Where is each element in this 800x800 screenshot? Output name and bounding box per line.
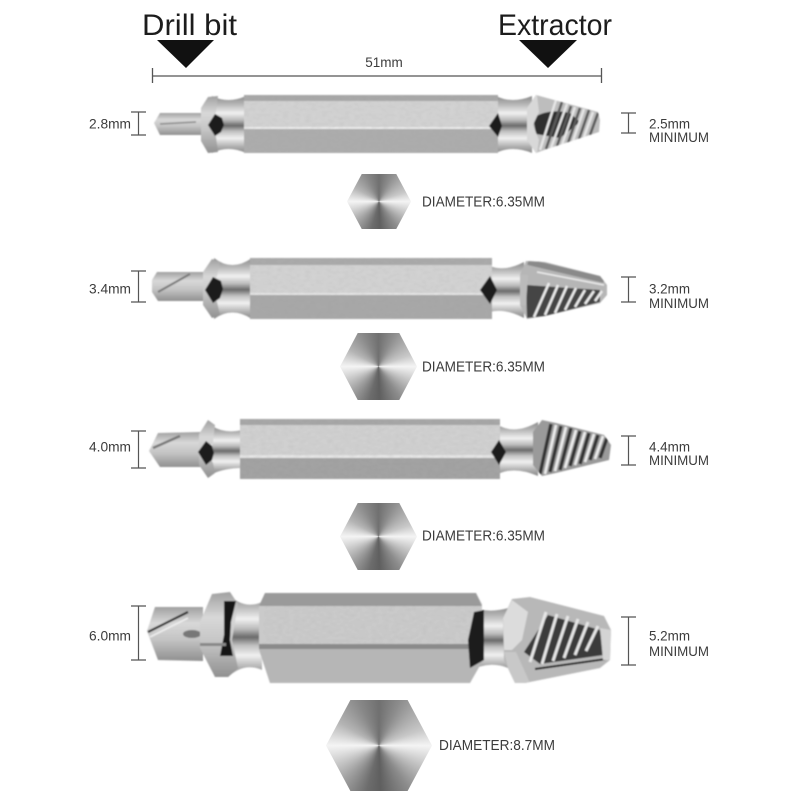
bit 2 left dimension: 3.4mm (89, 282, 131, 296)
bit 3 collar (199, 420, 215, 478)
bit 3 right dimension: 4.4mm (649, 440, 690, 454)
bit 1 right dimension: 2.5mm (649, 116, 690, 132)
hex cross-section 2 (340, 333, 417, 400)
bit 3 (149, 418, 613, 479)
bit 1 drill tip (154, 113, 201, 135)
overall length dimension 51mm (152, 55, 602, 83)
hex cross-section 1 (347, 174, 411, 229)
bit 4 right dimension: 5.2mm (649, 628, 690, 644)
bit 2 right dimension (621, 277, 709, 311)
diameter label 3: DIAMETER:6.35MM (422, 528, 545, 544)
bit 2 left dimension (89, 271, 146, 302)
diameter label 4: DIAMETER:8.7MM (439, 738, 555, 754)
arrow: extractor pointer (519, 40, 577, 68)
bit 1 left dimension (89, 112, 146, 135)
bit 3 extractor head (533, 418, 613, 478)
bit 1 hex body (244, 95, 498, 153)
bit 1 necks (212, 96, 246, 153)
bit 3 left dimension (89, 431, 146, 468)
bit 1 right dimension: MINIMUM (649, 130, 709, 145)
bit 3 hex body (240, 419, 500, 479)
infographic canvas (89, 14, 708, 791)
bit 4 left dimension: 6.0mm (89, 628, 131, 644)
bit 3 right dimension (621, 436, 709, 468)
bit 4 (147, 592, 613, 685)
bit 1 (154, 95, 602, 155)
arrow: drill bit pointer (157, 40, 214, 68)
bit 2 necks (214, 258, 252, 319)
bit 4 left dimension (89, 606, 146, 660)
bit 1 collar (201, 96, 218, 153)
bit 2 (152, 258, 608, 320)
bit 2 right dimension: MINIMUM (649, 296, 709, 311)
bit 3 right dimension: MINIMUM (649, 453, 709, 468)
diameter label 1: DIAMETER:6.35MM (422, 194, 545, 210)
bit 3 necks (212, 426, 242, 474)
bit 4 drill tip (147, 607, 203, 661)
bit 4 collar (200, 592, 238, 677)
bit 2 right dimension: 3.2mm (649, 282, 690, 296)
bit 3 drill tip (149, 432, 201, 467)
bit 2 hex body (250, 258, 492, 319)
hex cross-section 4 (326, 700, 432, 791)
bit 4 right dimension: MINIMUM (649, 644, 709, 659)
bit 2 extractor head (520, 258, 608, 320)
bit 4 extractor head (503, 595, 613, 685)
bit 1 left dimension: 2.8mm (89, 116, 131, 132)
bit 1 extractor head (527, 95, 602, 155)
bit 2 drill tip (152, 272, 205, 301)
bit 4 hex body (259, 593, 482, 683)
bit 1 right dimension (621, 113, 709, 145)
overall length dimension 51mm: 51mm (365, 55, 403, 70)
bit 2 collar (203, 259, 220, 318)
bit 3 left dimension: 4.0mm (89, 440, 131, 454)
diagram: bits, dimensions and labels (89, 14, 708, 750)
heading: Drill bit: Drill bit (142, 9, 238, 42)
heading: Extractor: Extractor (498, 9, 612, 42)
diameter label 2: DIAMETER:6.35MM (422, 360, 545, 376)
bit 4 necks (228, 594, 262, 677)
hex cross-section 3 (340, 503, 417, 570)
bit 4 right dimension (621, 617, 709, 665)
